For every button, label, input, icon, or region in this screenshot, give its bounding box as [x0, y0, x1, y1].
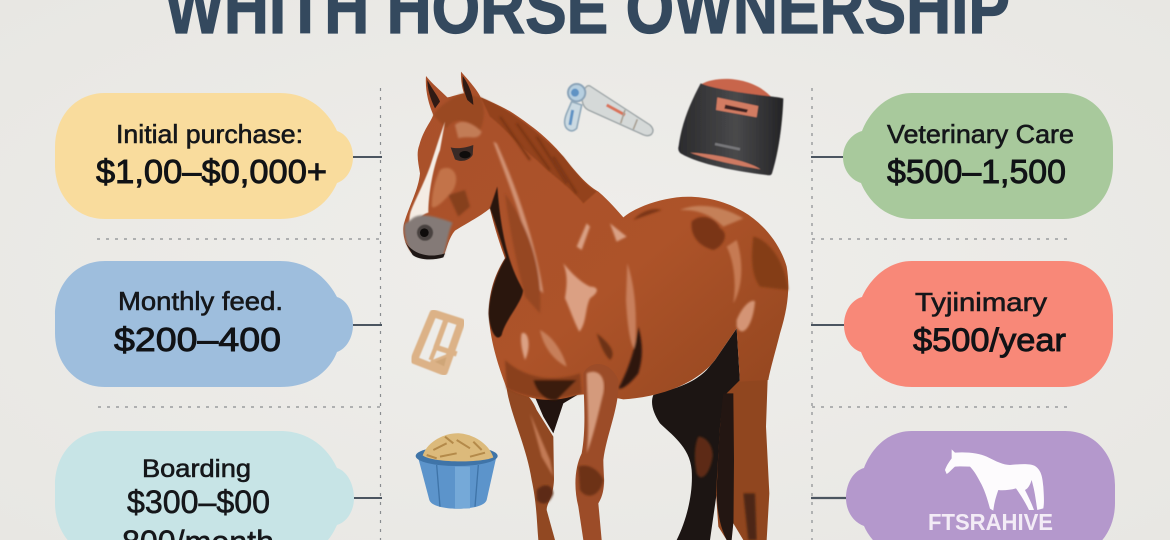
panel: monthly feed — [55, 261, 382, 387]
panel: veterinary care: $500–1,500 — [887, 153, 1066, 190]
panel: logo — [811, 431, 1115, 540]
panel: initial purchase — [55, 93, 382, 219]
muzzle — [404, 215, 453, 258]
eye — [451, 145, 473, 161]
chest shadow — [489, 187, 523, 338]
far hind leg — [652, 328, 741, 540]
panel: tyjinimary — [811, 261, 1113, 387]
panel: boarding: $300–$00 — [127, 484, 270, 520]
icon: syringe — [565, 84, 653, 136]
near front leg — [575, 364, 618, 540]
blaze — [409, 122, 445, 233]
panel: boarding — [55, 431, 382, 540]
panel: veterinary care: Veterinary Care — [887, 119, 1074, 149]
panel: initial purchase: Initial purchase: — [116, 119, 303, 149]
horse illustration — [403, 72, 788, 540]
shoulder highlight — [505, 206, 788, 400]
main body — [403, 72, 788, 400]
panel: boarding: Boarding — [142, 455, 251, 483]
icon: black cap — [678, 79, 783, 175]
tail and near hind leg — [716, 327, 769, 540]
icon: white horse — [945, 449, 1044, 511]
icon: feed bowl — [416, 433, 498, 509]
panel: initial purchase: $1,00–$0,000+ — [96, 153, 327, 190]
face and neck shading — [432, 122, 543, 313]
panel: monthly feed: Monthly feed. — [118, 286, 283, 316]
ears — [427, 76, 473, 108]
panel: monthly feed: $200–400 — [114, 321, 281, 358]
far front leg — [507, 386, 555, 540]
panel: veterinary care — [811, 93, 1113, 219]
panel: tyjinimary: $500/year — [913, 322, 1066, 358]
icon: buckle — [414, 313, 461, 372]
panel: tyjinimary: Tyjinimary — [915, 287, 1047, 317]
panel: logo: FTSRAHIVE — [928, 509, 1053, 535]
mane — [481, 97, 597, 203]
